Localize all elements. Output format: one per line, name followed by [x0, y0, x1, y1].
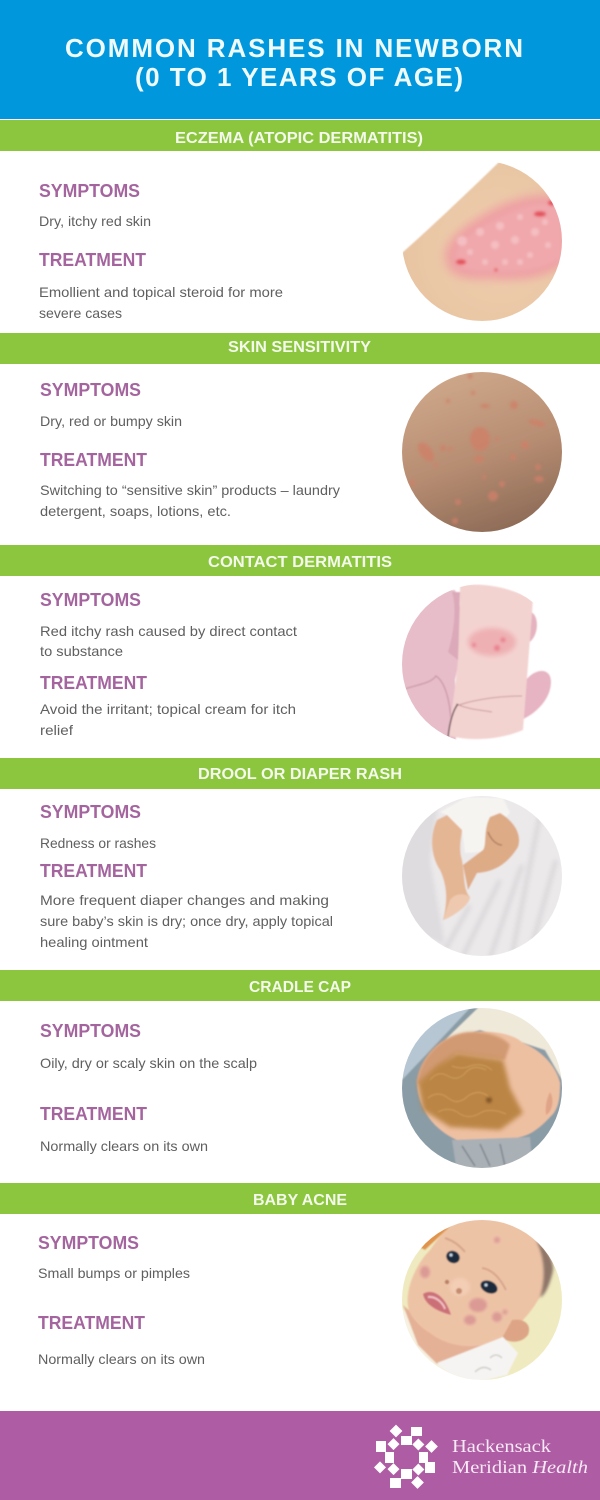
title [65, 33, 523, 92]
panel: skin sensitivity [0, 333, 600, 536]
heading band: baby acne: BABY ACNE [253, 1192, 347, 1209]
heading band: baby acne [0, 1183, 600, 1214]
title banner [0, 0, 600, 119]
text block: contact dermatitis treatment: relief [40, 722, 73, 738]
text block: eczema symptoms [39, 181, 151, 229]
text block: drool or diaper rash symptoms: Redness or rashes [40, 835, 156, 851]
text block: drool or diaper rash treatment: TREATMENT [40, 861, 147, 881]
text block: skin sensitivity treatment: detergent, soaps, lotions, etc. [40, 503, 231, 519]
text block: contact dermatitis treatment: Avoid the irritant; topical cream for itch [40, 701, 296, 717]
text block: eczema treatment [39, 250, 283, 321]
text block: eczema treatment: TREATMENT [39, 250, 146, 270]
heading band: cradle cap [0, 970, 600, 1001]
text block: contact dermatitis symptoms: to substance [40, 643, 123, 659]
panel: drool or diaper rash [0, 758, 600, 962]
text block: baby acne symptoms: Small bumps or pimples [38, 1265, 190, 1281]
text block: baby acne treatment [38, 1313, 205, 1367]
heading band: drool or diaper rash [0, 758, 600, 789]
text block: drool or diaper rash symptoms [40, 802, 156, 851]
footer band [0, 1411, 600, 1500]
text block: baby acne symptoms: SYMPTOMS [38, 1233, 139, 1253]
panel: eczema [0, 120, 600, 326]
text block: eczema symptoms: Dry, itchy red skin [39, 213, 151, 229]
logo text: Meridian Health [452, 1457, 588, 1477]
title: COMMON RASHES IN NEWBORN [65, 33, 523, 63]
heading band: skin sensitivity [0, 333, 600, 364]
text block: drool or diaper rash treatment [40, 861, 333, 950]
text block: cradle cap treatment [40, 1104, 208, 1154]
text block: drool or diaper rash treatment: healing ointment [40, 934, 148, 950]
heading band: eczema [0, 120, 600, 151]
text block: drool or diaper rash symptoms: SYMPTOMS [40, 802, 141, 822]
text block: contact dermatitis symptoms [40, 590, 297, 659]
heading band: skin sensitivity: SKIN SENSITIVITY [228, 339, 372, 356]
photo: rash on baby arm [402, 584, 552, 740]
panel: cradle cap [0, 970, 600, 1174]
logo text [452, 1436, 588, 1477]
text block: drool or diaper rash treatment: More frequent diaper changes and making [40, 892, 329, 908]
photo: bumpy skin [402, 372, 562, 532]
heading band: contact dermatitis [0, 545, 600, 576]
text block: cradle cap treatment: TREATMENT [40, 1104, 147, 1124]
text block: contact dermatitis treatment [40, 673, 296, 738]
text block: skin sensitivity treatment [40, 450, 340, 519]
logo mark: Hackensack Meridian Health [374, 1425, 438, 1489]
text block: skin sensitivity symptoms: SYMPTOMS [40, 380, 141, 400]
photo: baby in diaper on sheet [402, 796, 562, 956]
title: (0 TO 1 YEARS OF AGE) [135, 62, 463, 92]
text block: contact dermatitis symptoms: Red itchy rash caused by direct contact [40, 623, 297, 639]
text block: skin sensitivity symptoms [40, 380, 182, 429]
logo text: Hackensack [452, 1436, 551, 1456]
photo: eczema skin patch [402, 162, 562, 321]
photo: baby face with acne [402, 1220, 562, 1380]
photo: baby head with cradle cap [402, 1008, 562, 1168]
text block: eczema symptoms: SYMPTOMS [39, 181, 140, 201]
text block: cradle cap treatment: Normally clears on its own [40, 1138, 208, 1154]
text block: skin sensitivity symptoms: Dry, red or bumpy skin [40, 413, 182, 429]
text block: baby acne symptoms [38, 1233, 190, 1281]
text block: skin sensitivity treatment: Switching to “sensitive skin” products – laundry [40, 482, 340, 498]
text block: contact dermatitis symptoms: SYMPTOMS [40, 590, 141, 610]
text block: baby acne treatment: Normally clears on its own [38, 1351, 205, 1367]
text block: cradle cap symptoms: Oily, dry or scaly skin on the scalp [40, 1055, 257, 1071]
text block: drool or diaper rash treatment: sure baby’s skin is dry; once dry, apply topical [40, 913, 333, 929]
heading band: eczema: ECZEMA (ATOPIC DERMATITIS) [175, 130, 423, 147]
text block: eczema treatment: Emollient and topical steroid for more [39, 284, 283, 300]
text block: contact dermatitis treatment: TREATMENT [40, 673, 147, 693]
panel: contact dermatitis [0, 545, 600, 750]
text block: baby acne treatment: TREATMENT [38, 1313, 145, 1333]
panel: baby acne [0, 1183, 600, 1386]
text block: eczema treatment: severe cases [39, 305, 122, 321]
heading band: contact dermatitis: CONTACT DERMATITIS [208, 554, 392, 571]
text block: skin sensitivity treatment: TREATMENT [40, 450, 147, 470]
text block: cradle cap symptoms: SYMPTOMS [40, 1021, 141, 1041]
heading band: drool or diaper rash: DROOL OR DIAPER RASH [198, 766, 402, 783]
heading band: cradle cap: CRADLE CAP [249, 979, 351, 996]
text block: cradle cap symptoms [40, 1021, 257, 1071]
